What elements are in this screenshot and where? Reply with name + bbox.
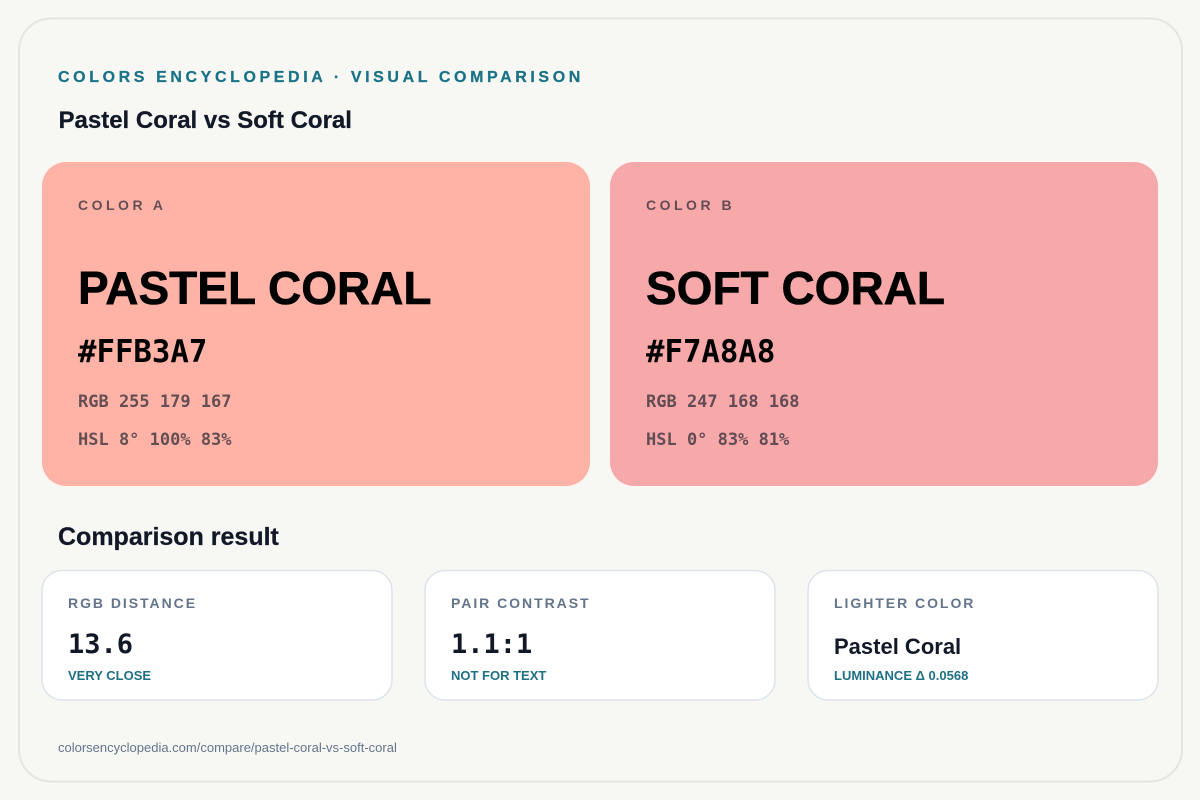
title: Pastel Coral vs Soft Coral [58,107,352,134]
color B name: SOFT CORAL [646,262,945,314]
color A hex: #FFB3A7 [78,335,207,370]
lighter color label: LIGHTER COLOR [834,595,975,611]
color A name: PASTEL CORAL [78,262,432,314]
pair contrast label: PAIR CONTRAST [451,595,591,611]
color B hex: #F7A8A8 [646,335,775,370]
color B label: COLOR B [646,197,735,213]
color A rgb: RGB 255 179 167 [78,392,232,412]
footer url: colorsencyclopedia.com/compare/pastel-coral-vs-soft-coral [58,740,397,755]
pair contrast note: NOT FOR TEXT [451,668,546,683]
panel: lighter color [808,570,1158,700]
color A hsl: HSL 8° 100% 83% [78,430,232,450]
section heading: Comparison result [58,523,280,551]
color B hsl: HSL 0° 83% 81% [646,430,790,450]
panel: color B [610,162,1158,486]
eyebrow heading: COLORS ENCYCLOPEDIA · VISUAL COMPARISON [58,69,584,86]
RGB distance value: 13.6 [68,629,133,660]
RGB distance note: VERY CLOSE [68,668,151,683]
RGB distance label: RGB DISTANCE [68,595,197,611]
panel: color A [42,162,590,486]
lighter color value: Pastel Coral [834,634,961,659]
lighter color note: LUMINANCE Δ 0.0568 [834,668,968,683]
color B rgb: RGB 247 168 168 [646,392,800,412]
panel: RGB distance [42,570,392,700]
panel: pair contrast [425,570,775,700]
color A label: COLOR A [78,197,167,213]
pair contrast value: 1.1:1 [451,629,532,660]
